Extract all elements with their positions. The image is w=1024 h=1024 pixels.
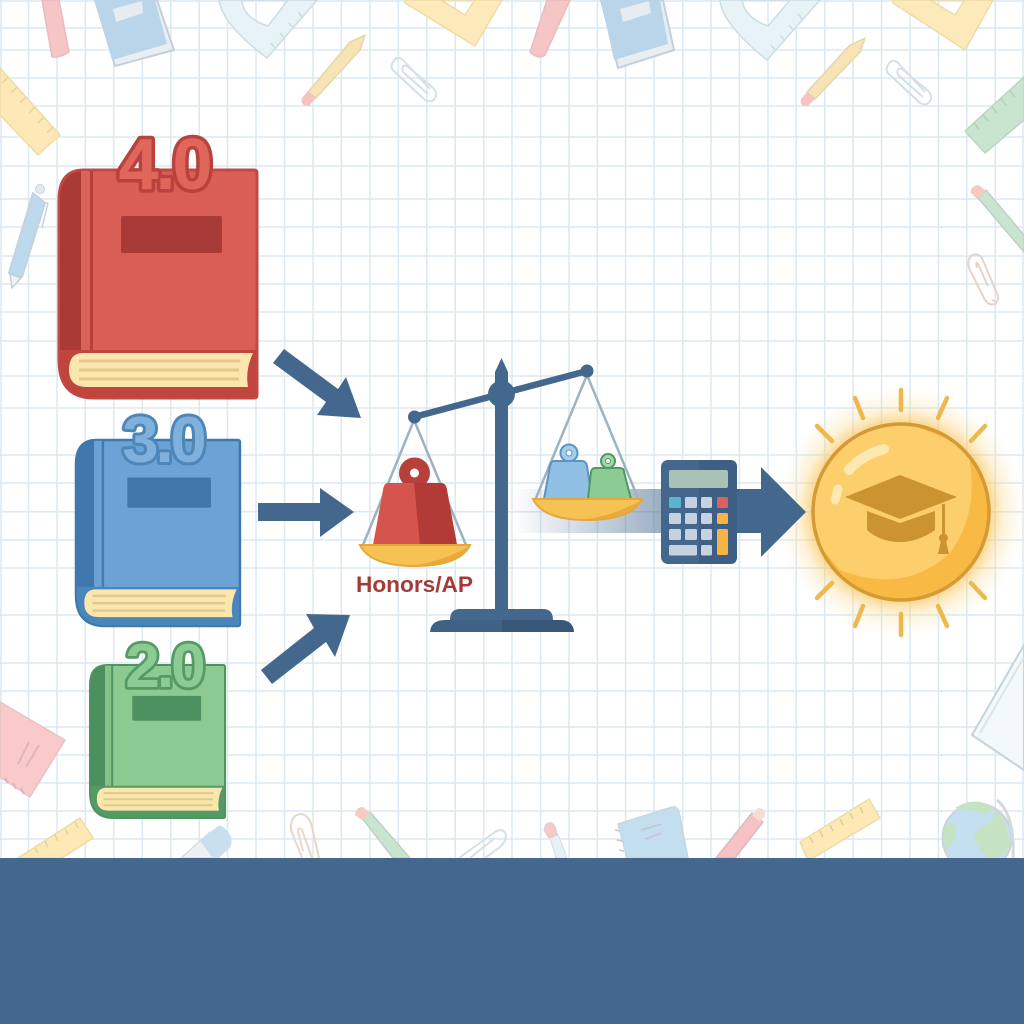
faded arrow shaft to calculator — [512, 489, 762, 533]
doodle: paperclip right — [968, 254, 998, 304]
bottom navy band — [0, 858, 1024, 1024]
blue book 3.0 — [76, 403, 240, 626]
doodle: red notebook left — [0, 702, 65, 797]
grade label 2.0: 2.0 — [125, 632, 203, 701]
doodle: blue pen left — [9, 184, 48, 288]
honors label: Honors/AP — [356, 572, 473, 597]
scale strings — [363, 375, 638, 545]
calculator keys — [669, 497, 728, 556]
doodle: paperclip top right — [887, 61, 931, 104]
doodle: red pencil stub top left — [42, 0, 69, 57]
doodle: tablet right — [972, 645, 1024, 770]
doodle: yellow ruler bottom right — [800, 799, 880, 858]
doodle: blue notebook top right — [601, 0, 674, 68]
doodle: green ruler right — [965, 77, 1024, 153]
scale post and base — [430, 358, 574, 632]
green book 2.0 — [90, 632, 225, 818]
grade label 3.0: 3.0 — [122, 403, 205, 476]
balance scale — [360, 358, 642, 632]
doodle: set square top right — [720, 0, 820, 60]
calculator — [661, 460, 737, 564]
left gold pan — [360, 545, 470, 566]
calculator body — [661, 460, 737, 564]
doodle: pencil top — [302, 35, 365, 106]
grade label 4.0: 4.0 — [118, 125, 210, 205]
doodle: yellow ruler bottom left — [18, 818, 93, 858]
medal glow — [776, 387, 1024, 637]
doodle: globe — [942, 800, 1013, 872]
blue weight — [544, 444, 592, 499]
medal highlights — [849, 449, 884, 470]
doodle: pencil top right — [801, 38, 865, 106]
medal disc — [813, 424, 989, 600]
doodle: set square top — [219, 0, 317, 58]
doodle: red pencil stub top right — [530, 0, 570, 57]
doodle: paperclip bottom centre — [459, 830, 506, 858]
calculator screen — [669, 470, 728, 488]
green book body — [90, 665, 225, 818]
doodle: white pencil bottom — [544, 823, 567, 858]
doodle: blue notebook top left — [95, 0, 174, 66]
scale beam — [408, 364, 594, 424]
green weight — [588, 454, 631, 499]
doodle: paperclip bottom — [291, 814, 319, 858]
doodle: blue spiral notebook bottom — [615, 807, 688, 858]
red book 4.0 — [59, 125, 257, 398]
doodle: green pencil bottom — [355, 807, 410, 858]
doodle: yellow triangle top right — [893, 0, 993, 50]
arrow: red book to scale — [273, 349, 361, 418]
doodle: paperclip top — [392, 58, 436, 101]
arrow: blue book to scale — [258, 488, 354, 537]
doodle: red pencil bottom — [716, 808, 765, 858]
arrow: green book to scale — [261, 614, 350, 684]
blue book body — [76, 440, 240, 626]
medal rays — [817, 390, 985, 635]
doodle: yellow ruler left — [0, 68, 60, 155]
golden medal with graduation cap — [776, 387, 1024, 637]
doodle: yellow triangle top — [405, 0, 502, 46]
right gold pan — [533, 499, 642, 520]
doodle: eraser bottom — [181, 826, 232, 858]
red book body — [59, 170, 257, 398]
heavy red weight — [373, 458, 457, 545]
arrow: calculator to medal — [735, 467, 806, 557]
graduation cap — [845, 475, 957, 554]
doodle: green pencil right — [970, 185, 1024, 252]
